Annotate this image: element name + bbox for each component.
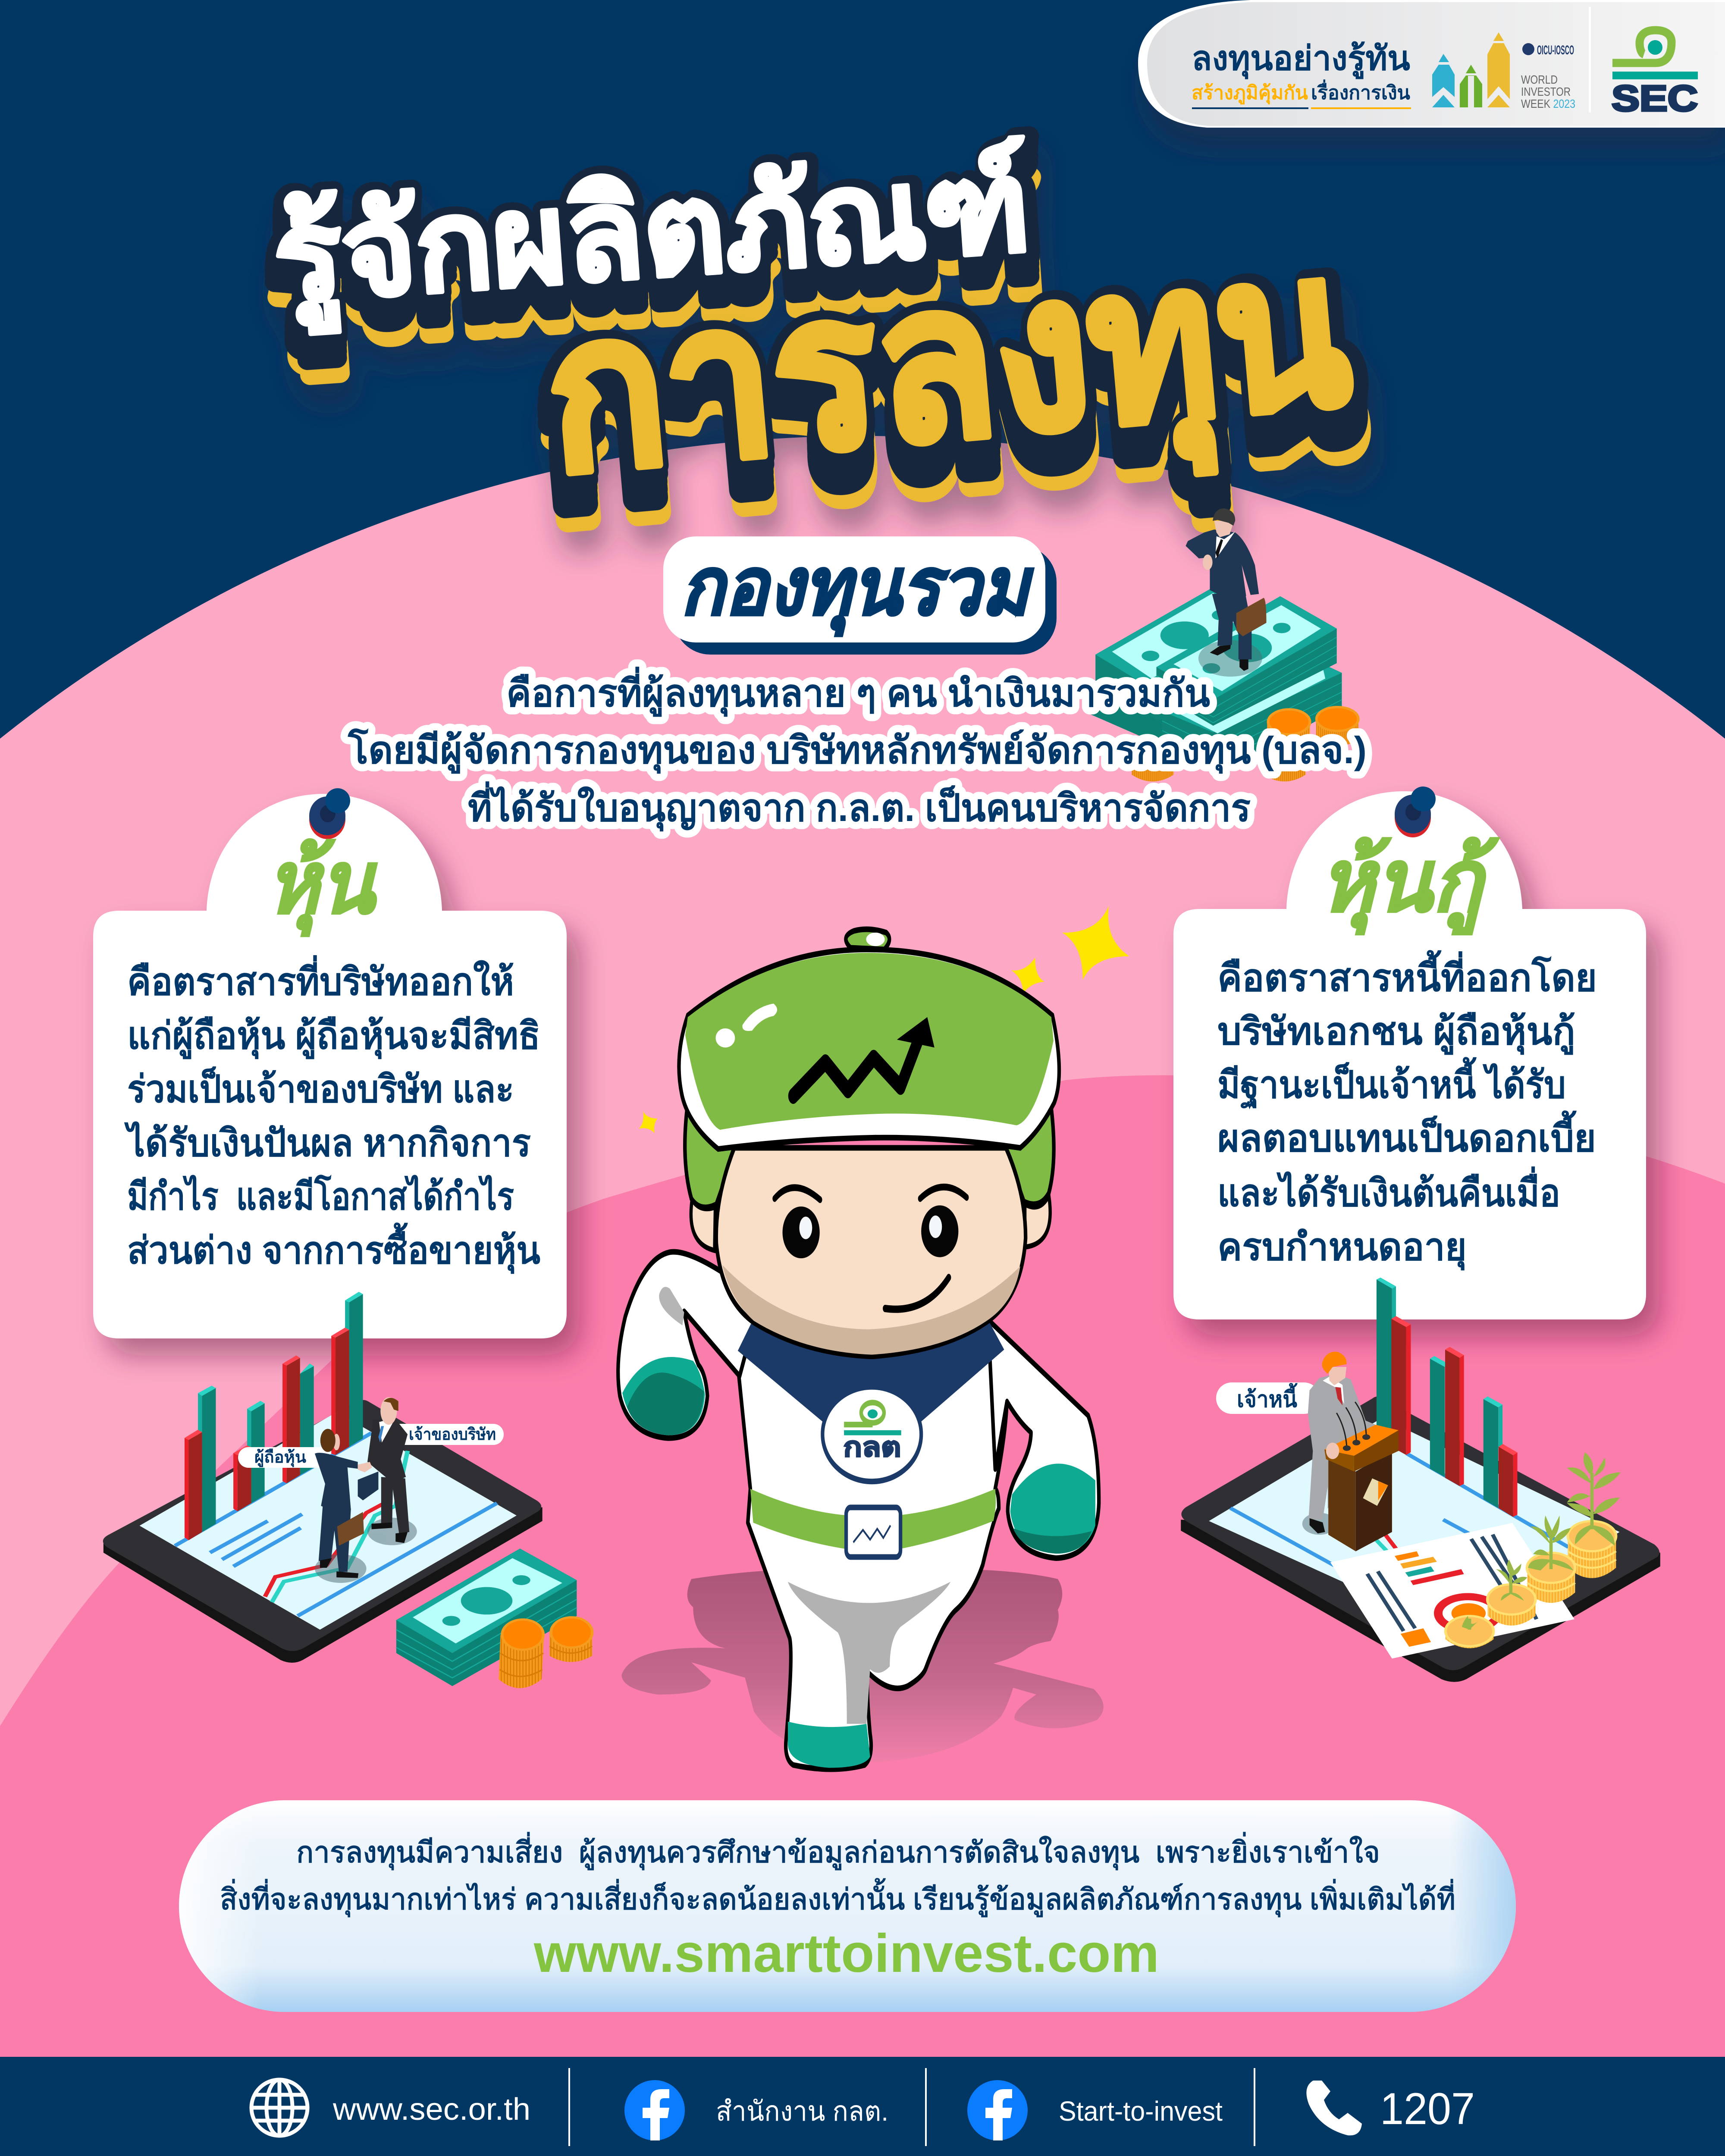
- hotline number: 1207: [1380, 2084, 1475, 2134]
- man suit: [1308, 1374, 1376, 1520]
- extrude layers: รู้จักผลิตภัณฑ์: [266, 147, 1040, 350]
- body text: มีกำไร และมีโอกาสได้กำไร: [127, 1175, 514, 1218]
- body text: ครบกำหนดอายุ: [1217, 1225, 1467, 1271]
- front money stack: [1157, 596, 1337, 726]
- eyes: [782, 1205, 958, 1258]
- body text: ได้รับเงินปันผล หากกิจการ: [124, 1122, 531, 1164]
- panel shape: [93, 794, 567, 1338]
- tablet top: [1181, 1397, 1659, 1670]
- extrude layers: รู้จักผลิตภัณฑ์: [267, 141, 1040, 343]
- extrude layers: การลงทุน: [533, 207, 1366, 531]
- facebook group name: Start-to-invest: [1059, 2096, 1223, 2127]
- title: การลงทุน: [530, 207, 1370, 577]
- footer note pill: [179, 1800, 1516, 2012]
- hat highlights: [715, 1003, 777, 1047]
- back money stack: [1095, 589, 1277, 721]
- pin: [309, 788, 350, 839]
- extrude layers: รู้จักผลิตภัณฑ์: [266, 154, 1040, 357]
- description line 2: โดยมีผู้จัดการกองทุนของ บริษัทหลักทรัพย์จัดการกองทุน (บลจ.): [348, 728, 1367, 774]
- left man: [315, 1429, 372, 1578]
- hat arrow chart: [793, 1017, 935, 1096]
- candlestick bars: [1377, 1278, 1518, 1517]
- campaign subtitle yellow: สร้างภูมิคุ้มกัน: [1192, 82, 1308, 105]
- tablet side: [104, 1507, 543, 1663]
- trousers shading: [788, 1582, 950, 1724]
- body text: ร่วมเป็นเจ้าของบริษัท และ: [127, 1066, 514, 1110]
- body: [739, 1320, 1007, 1769]
- extrude layers: การลงทุน: [533, 240, 1365, 563]
- header logo pill: [1138, 0, 1725, 128]
- dividers: [568, 2068, 1255, 2146]
- illustration: stock holders on tablet: [103, 1292, 592, 1688]
- ground shadow: [621, 1569, 1104, 1762]
- right man: [358, 1397, 409, 1543]
- gold coins: [1132, 707, 1358, 781]
- illustration: debenture holder on tablet: [1181, 1278, 1660, 1682]
- underline bars: [1192, 107, 1411, 109]
- candlestick bars: [185, 1292, 363, 1540]
- icon: facebook: [624, 2080, 685, 2140]
- screen graph lines: [175, 1433, 497, 1616]
- OICU-IOSCO mark: [1522, 43, 1574, 57]
- face and hair: [1329, 1367, 1346, 1385]
- body text: ผลตอบแทนเป็นดอกเบี้ย: [1217, 1110, 1596, 1159]
- heading: หุ้น: [267, 835, 377, 937]
- badge logo mark: [844, 1403, 901, 1435]
- lower money stack right: [1162, 665, 1342, 777]
- belt: [750, 1489, 996, 1549]
- label pill: เจ้าของบริษัท: เจ้าของบริษัท: [409, 1426, 496, 1444]
- note line 2: สิ่งที่จะลงทุนมากเท่าไหร่ ความเสี่ยงก็จะลดน้อยลงเท่านั้น เรียนรู้ข้อมูลผลิตภัณฑ์การลงทุน เพิ่มเติมได้ที่: [220, 1878, 1455, 1917]
- front face: การลงทุน: [538, 208, 1360, 530]
- pin: [1395, 787, 1436, 837]
- left arm shading: [659, 1287, 684, 1326]
- body text: [1217, 950, 1597, 1271]
- left mitten: [622, 1357, 705, 1435]
- pencil icons: [1432, 32, 1510, 107]
- label pill: ผู้ถือหุ้น: [238, 1447, 331, 1468]
- badge text: กองทุนรวม: [681, 542, 1034, 636]
- shoe: [1310, 1518, 1325, 1533]
- coin stacks with plants: [1446, 1452, 1621, 1648]
- hat nub: [846, 929, 889, 950]
- man jacket: [1186, 530, 1259, 602]
- tablet screen: [140, 1412, 517, 1630]
- body text: คือตราสารที่บริษัทออกให้: [127, 955, 514, 1003]
- body text: คือตราสารหนี้ที่ออกโดย: [1217, 950, 1597, 999]
- extrude layers: การลงทุน: [533, 216, 1365, 539]
- world investor week text: [1521, 73, 1575, 110]
- heading: หุ้นกู้: [1320, 833, 1499, 935]
- coins: [499, 1617, 592, 1688]
- man hand: [1203, 555, 1213, 570]
- website text: www.sec.or.th: [332, 2092, 530, 2127]
- world investor week text: WEEK 2023: [1521, 97, 1575, 110]
- tablet top: [103, 1400, 541, 1651]
- eyebrows and mouth: [775, 1187, 966, 1309]
- hat green: [685, 953, 1054, 1130]
- pill background: [1138, 0, 1725, 128]
- title: รู้จักผลิตภัณฑ์: [264, 135, 1044, 378]
- heading badge: กองทุนรวม: [663, 536, 1057, 655]
- hand: [1326, 1443, 1339, 1459]
- stars: [639, 906, 1129, 1133]
- ground shadows: [315, 1518, 417, 1583]
- badge white face: [663, 536, 1045, 642]
- SEC logo: [1612, 30, 1698, 119]
- description line 1: คือการที่ผู้ลงทุนหลาย ๆ คน นำเงินมารวมกัน: [506, 667, 1210, 717]
- body text: บริษัทเอกชน ผู้ถือหุ้นกู้: [1217, 1010, 1575, 1055]
- screen lines: [1230, 1454, 1568, 1567]
- money stack: [396, 1548, 577, 1686]
- right arm: [988, 1320, 1099, 1558]
- belt buckle: [846, 1507, 900, 1557]
- right mitten shade: [1013, 1528, 1092, 1554]
- pill inner gradient: [1147, 2, 1725, 126]
- left mitten shade: [627, 1373, 704, 1435]
- extrude layers: การลงทุน: [536, 254, 1368, 577]
- illustration: businessman on money stacks: [1088, 508, 1358, 781]
- website url: www.smarttoinvest.com: [533, 1924, 1159, 1984]
- label pill: เจ้าหนี้: เจ้าหนี้: [1237, 1383, 1298, 1412]
- panel: หุ้นกู้: [1173, 787, 1646, 1319]
- dark pink ground shape: [0, 1075, 1725, 2156]
- world investor week text: WORLD: [1521, 73, 1558, 86]
- extrude layers: การลงทุน: [533, 232, 1365, 555]
- description line 3: ที่ได้รับใบอนุญาตจาก ก.ล.ต. เป็นคนบริหารจัดการ: [468, 781, 1251, 832]
- mascot character: [618, 906, 1129, 1769]
- podium: [1328, 1459, 1356, 1551]
- body text: และได้รับเงินต้นคืนเมื่อ: [1217, 1166, 1560, 1214]
- body text: ส่วนต่าง จากการซื้อขายหุ้น: [127, 1222, 540, 1274]
- badge text: กลต: [843, 1432, 901, 1462]
- SEC logo: SEC: [1612, 78, 1698, 119]
- navy collar: [738, 1320, 1004, 1424]
- facebook page name: สำนักงาน กลต.: [716, 2096, 888, 2127]
- right mitten: [1010, 1463, 1095, 1554]
- bar background: [0, 2057, 1725, 2156]
- hat: [679, 950, 1059, 1149]
- shirt and tie: [1323, 1376, 1344, 1404]
- man face and hair: [1214, 521, 1234, 537]
- chin shade: [722, 1265, 1020, 1355]
- badge navy backing: [674, 545, 1057, 655]
- label pill: ผู้ถือหุ้น: ผู้ถือหุ้น: [254, 1448, 306, 1467]
- hair: [685, 1103, 1054, 1207]
- note line 1: การลงทุนมีความเสี่ยง ผู้ลงทุนควรศึกษาข้อมูลก่อนการตัดสินใจลงทุน เพราะยิ่งเราเข้าใจ: [296, 1832, 1380, 1870]
- buckle chart icon: [853, 1526, 891, 1542]
- figure: speaker at podium: [1302, 1352, 1399, 1551]
- panel shape: [1173, 791, 1646, 1319]
- left arm: [618, 1252, 754, 1438]
- icon: globe: [251, 2080, 307, 2136]
- microphones: [1336, 1402, 1366, 1448]
- man legs: [1212, 592, 1251, 659]
- face: [716, 1148, 1026, 1357]
- tablet screen: [1209, 1418, 1620, 1630]
- extrude layers: รู้จักผลิตภัณฑ์: [267, 135, 1041, 337]
- extrude layers: รู้จักผลิตภัณฑ์: [266, 160, 1040, 363]
- ground shadow: [1302, 1513, 1336, 1535]
- hat nub highlight: [866, 933, 885, 946]
- divider: [1589, 7, 1591, 113]
- label pill: เจ้าหนี้: [1216, 1382, 1320, 1414]
- body text: แก่ผู้ถือหุ้น ผู้ถือหุ้นจะมีสิทธิ: [127, 1014, 540, 1059]
- pill side shading: [179, 1800, 1516, 2012]
- paper report: [1330, 1523, 1574, 1658]
- campaign title: ลงทุนอย่างรู้ทัน: [1192, 39, 1410, 79]
- main description text: [348, 667, 1367, 832]
- tablet side: [1181, 1520, 1660, 1682]
- man shoes: [1210, 645, 1248, 671]
- shoe: [788, 1722, 870, 1768]
- campaign subtitle navy: เรื่องการเงิน: [1311, 79, 1410, 103]
- pink arc background: [0, 436, 1725, 2070]
- extrude layers: รู้จักผลิตภัณฑ์: [269, 175, 1043, 378]
- man shirt and tie: [1215, 532, 1235, 558]
- body text: มีฐานะเป็นเจ้าหนี้ ได้รับ: [1217, 1057, 1566, 1109]
- ears: [691, 1196, 1050, 1250]
- icon: facebook: [967, 2080, 1028, 2140]
- figures: investors shaking hands: [315, 1397, 417, 1583]
- world investor week text: INVESTOR: [1521, 85, 1571, 98]
- extrude layers: การลงทุน: [532, 224, 1365, 547]
- panel: หุ้น: [93, 788, 567, 1338]
- header logo pill: OICU-IOSCO: [1537, 43, 1574, 57]
- chest badge: [822, 1387, 921, 1482]
- pill shape: [179, 1800, 1516, 2012]
- front face: รู้จักผลิตภัณฑ์: [270, 135, 1035, 337]
- body text: [124, 955, 540, 1274]
- briefcase: [1236, 598, 1267, 636]
- lower money stack left: [1088, 669, 1233, 740]
- icon: phone: [1306, 2081, 1362, 2135]
- label pill: เจ้าของบริษัท: [388, 1424, 504, 1445]
- bottom contact bar: [0, 2057, 1725, 2156]
